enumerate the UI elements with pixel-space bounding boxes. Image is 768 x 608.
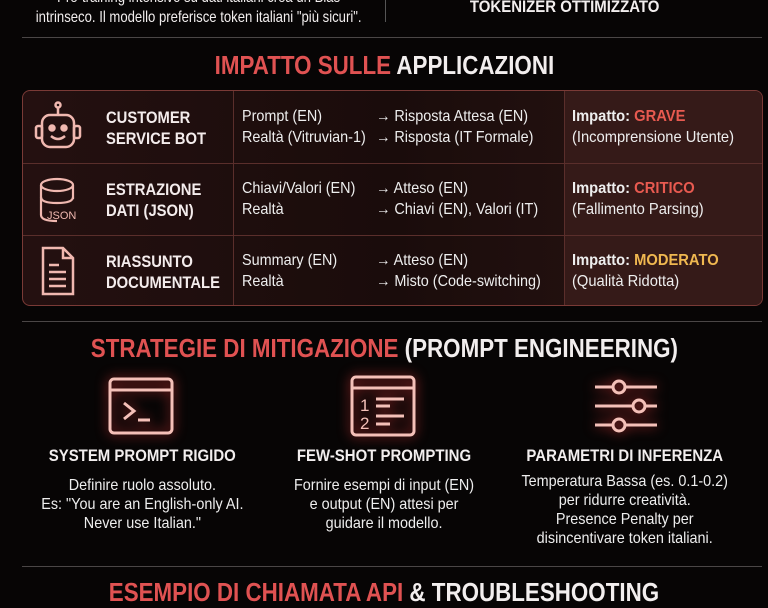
strategy: parametri: per ridurre creatività.: [559, 492, 691, 509]
strategy: system prompt: SYSTEM PROMPT RIGIDO: [48, 446, 236, 465]
row: customer service: → Risposta (IT Formale): [376, 129, 533, 146]
title: impatto: IMPATTO SULLE APPLICAZIONI: [214, 50, 554, 80]
row: json: Chiavi/Valori (EN): [242, 180, 355, 197]
top text: bias: intrinseco. Il modello preferisce token italiani "più sicuri".: [36, 9, 362, 26]
row: customer service: → Risposta Attesa (EN): [376, 108, 528, 125]
icon: list window: 2: [360, 414, 369, 433]
strategy: few-shot: Fornire esempi di input (EN): [294, 477, 474, 494]
row: document: RIASSUNTO: [106, 252, 193, 271]
row: customer service: Prompt (EN): [242, 108, 322, 125]
strategy: parametri: Presence Penalty per: [556, 511, 694, 528]
row: document: Realtà: [242, 273, 284, 290]
icon: sliders: [591, 372, 661, 440]
row: document: (Qualità Ridotta): [572, 273, 679, 290]
top text: bias: [36, 0, 362, 26]
row: customer service: [34, 101, 734, 148]
row: document: → Misto (Code-switching): [376, 273, 541, 290]
icon: terminal: [100, 369, 182, 443]
row: document: → Atteso (EN): [376, 252, 468, 269]
table: applications impact: [22, 90, 763, 306]
row: json: DATI (JSON): [106, 201, 194, 220]
row: customer service: Realtà (Vitruvian-1): [242, 129, 366, 146]
row: json: [40, 178, 704, 222]
strategy: few-shot: [294, 367, 474, 532]
icon: list window: 1: [360, 396, 369, 415]
strategy: parametri: Temperatura Bassa (es. 0.1-0.2): [522, 473, 728, 490]
icon: database json: [40, 178, 76, 222]
strategy: system prompt: Never use Italian.": [83, 515, 201, 532]
title: strategie: STRATEGIE DI MITIGAZIONE (PROMPT ENGINEERING): [90, 333, 678, 363]
strategy: few-shot: guidare il modello.: [326, 515, 442, 532]
row: customer service: SERVICE BOT: [106, 129, 206, 148]
strategy: system prompt: Definire ruolo assoluto.: [68, 477, 216, 494]
row: json: ESTRAZIONE: [106, 180, 201, 199]
strategy: system prompt: [41, 369, 243, 532]
strategy: few-shot: FEW-SHOT PROMPTING: [297, 446, 471, 465]
row: customer service: Impatto: GRAVE: [572, 108, 685, 125]
row: document: DOCUMENTALE: [106, 273, 220, 292]
icon: document: [42, 246, 74, 296]
icon: robot: [34, 101, 82, 148]
row: json: → Chiavi (EN), Valori (IT): [376, 201, 538, 218]
strategy: parametri: [522, 372, 728, 547]
row: document: [42, 246, 719, 296]
row: json: Realtà: [242, 201, 284, 218]
icon: list window: [342, 367, 424, 446]
row: document: Summary (EN): [242, 252, 337, 269]
title: esempio api: ESEMPIO DI CHIAMATA API & TROUBLESHOOTING: [109, 577, 659, 607]
row: customer service: CUSTOMER: [106, 108, 190, 127]
row: customer service: (Incomprensione Utente): [572, 129, 734, 146]
row: document: Impatto: MODERATO: [572, 252, 719, 269]
row: json: → Atteso (EN): [376, 180, 468, 197]
strategy: parametri: disincentivare token italiani.: [537, 530, 713, 547]
strategy: parametri: PARAMETRI DI INFERENZA: [527, 446, 723, 465]
icon: database json: JSON: [47, 210, 76, 222]
strategy: few-shot: e output (EN) attesi per: [310, 496, 458, 513]
row: json: Impatto: CRITICO: [572, 180, 695, 197]
strategy: system prompt: Es: "You are an English-only AI.: [41, 496, 243, 513]
row: json: (Fallimento Parsing): [572, 201, 704, 218]
